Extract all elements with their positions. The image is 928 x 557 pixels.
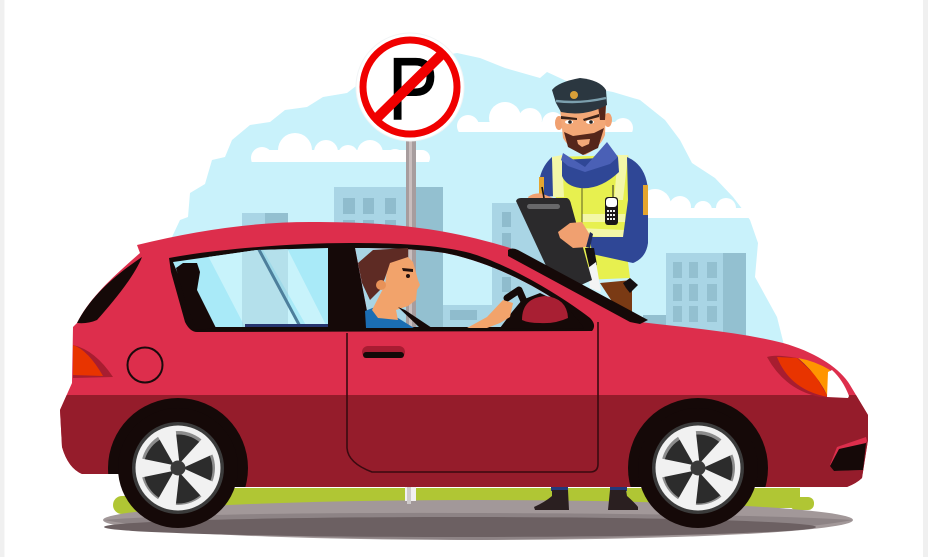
dashboard red dome — [522, 296, 568, 323]
rear wheel — [118, 408, 238, 528]
driver brow and eye — [402, 268, 413, 272]
low building seen through windshield — [443, 305, 503, 330]
driver — [358, 248, 513, 328]
right arm — [590, 157, 648, 263]
headrest and seat — [176, 263, 216, 330]
signpost pole — [405, 135, 416, 504]
letter P: P — [388, 40, 438, 138]
cloud left — [251, 133, 430, 162]
sky blob — [165, 53, 784, 345]
grass — [113, 488, 814, 514]
dashboard — [500, 293, 584, 329]
headlight — [767, 356, 849, 398]
face — [560, 104, 606, 155]
bumper highlight and grille — [830, 437, 867, 471]
building far left — [242, 213, 288, 253]
building behind officer — [492, 203, 552, 328]
no parking sign — [356, 33, 464, 141]
cap — [552, 78, 607, 113]
rear side window — [173, 245, 328, 332]
driver shirt — [365, 307, 414, 328]
cloud right — [648, 189, 748, 218]
seat belt — [398, 307, 432, 328]
rear light — [73, 345, 113, 378]
hair at temple — [598, 104, 606, 120]
eyes and brows — [561, 114, 599, 124]
wheel arches — [108, 398, 768, 487]
red slash — [377, 54, 442, 118]
hi-vis vest — [552, 155, 634, 280]
window frame — [169, 243, 594, 332]
building behind sign — [334, 187, 443, 332]
fuel cap — [128, 348, 162, 382]
windshield strip — [508, 248, 648, 324]
hand on clipboard — [558, 222, 590, 248]
building right — [643, 253, 746, 338]
clipboard — [516, 198, 592, 290]
driver neck and face — [372, 257, 420, 320]
writing hand and pen — [528, 193, 553, 202]
cloud middle — [457, 102, 633, 132]
door outline — [347, 322, 598, 472]
steering wheel — [507, 290, 526, 306]
legs and shoes — [534, 487, 638, 510]
ears — [555, 116, 563, 130]
car body — [60, 222, 868, 487]
torso yoke — [562, 157, 619, 188]
driver hair — [358, 248, 408, 300]
collar — [561, 142, 618, 172]
holster and belt — [600, 280, 632, 312]
lower dark body band — [55, 395, 875, 490]
rear glass dark — [77, 257, 142, 323]
car — [55, 222, 875, 538]
front wheel — [638, 408, 758, 528]
left arm — [540, 157, 556, 197]
radio — [605, 185, 618, 225]
beard — [564, 128, 604, 155]
police officer — [516, 78, 648, 510]
door handle — [362, 346, 405, 358]
driver arm and hand — [467, 300, 513, 328]
road ellipse — [103, 500, 853, 540]
baton — [585, 248, 597, 270]
